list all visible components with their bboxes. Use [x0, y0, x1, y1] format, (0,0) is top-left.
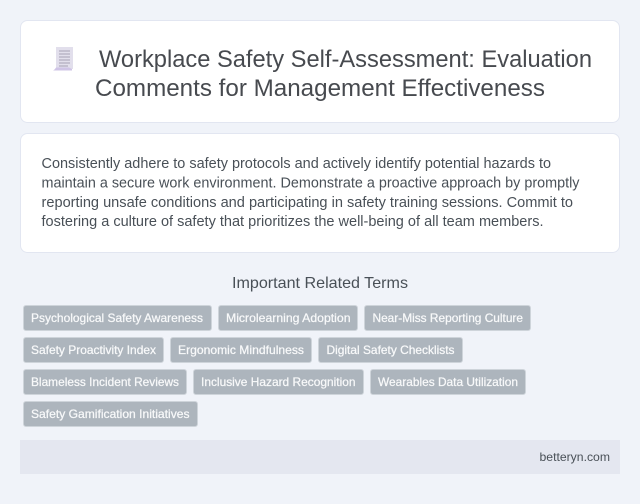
tag: Inclusive Hazard Recognition [201, 375, 356, 389]
tag [364, 306, 530, 330]
icon: document scroll [53, 47, 73, 70]
tag [24, 370, 186, 394]
tag [24, 402, 198, 426]
tag [170, 338, 312, 362]
description text: Consistently adhere to safety protocols and actively identify potential hazards to [42, 156, 551, 172]
panel: description card [20, 134, 620, 252]
description text: maintain a secure work environment. Demonstrate a proactive approach by promptly [42, 176, 580, 192]
description text [42, 156, 580, 230]
footer source text: betteryn.com [540, 450, 610, 464]
tag: Blameless Incident Reviews [31, 375, 179, 389]
panel: title card [20, 20, 620, 122]
tag: Safety Gamification Initiatives [31, 407, 190, 421]
tag: Safety Proactivity Index [31, 343, 156, 357]
tag: Ergonomic Mindfulness [178, 343, 304, 357]
tag [370, 370, 526, 394]
tag: Near-Miss Reporting Culture [372, 311, 523, 325]
tag list [24, 306, 530, 426]
tag: Wearables Data Utilization [378, 375, 518, 389]
tag [194, 370, 364, 394]
tag: Microlearning Adoption [226, 311, 350, 325]
tag [24, 306, 212, 330]
tag [24, 338, 164, 362]
tag: Psychological Safety Awareness [31, 311, 203, 325]
tag [218, 306, 358, 330]
description text: fostering a culture of safety that prioritizes the well-being of all team members. [42, 214, 544, 230]
heading: related terms: Important Related Terms [232, 275, 408, 292]
description text: reporting unsafe conditions and participating in safety training sessions. Commit to [42, 195, 573, 211]
title text: Workplace Safety Self-Assessment: Evaluation [99, 46, 592, 73]
title text [95, 46, 592, 102]
footer bar [20, 440, 620, 474]
tag: Digital Safety Checklists [326, 343, 454, 357]
title text: Comments for Management Effectiveness [95, 75, 545, 102]
tag [318, 338, 462, 362]
